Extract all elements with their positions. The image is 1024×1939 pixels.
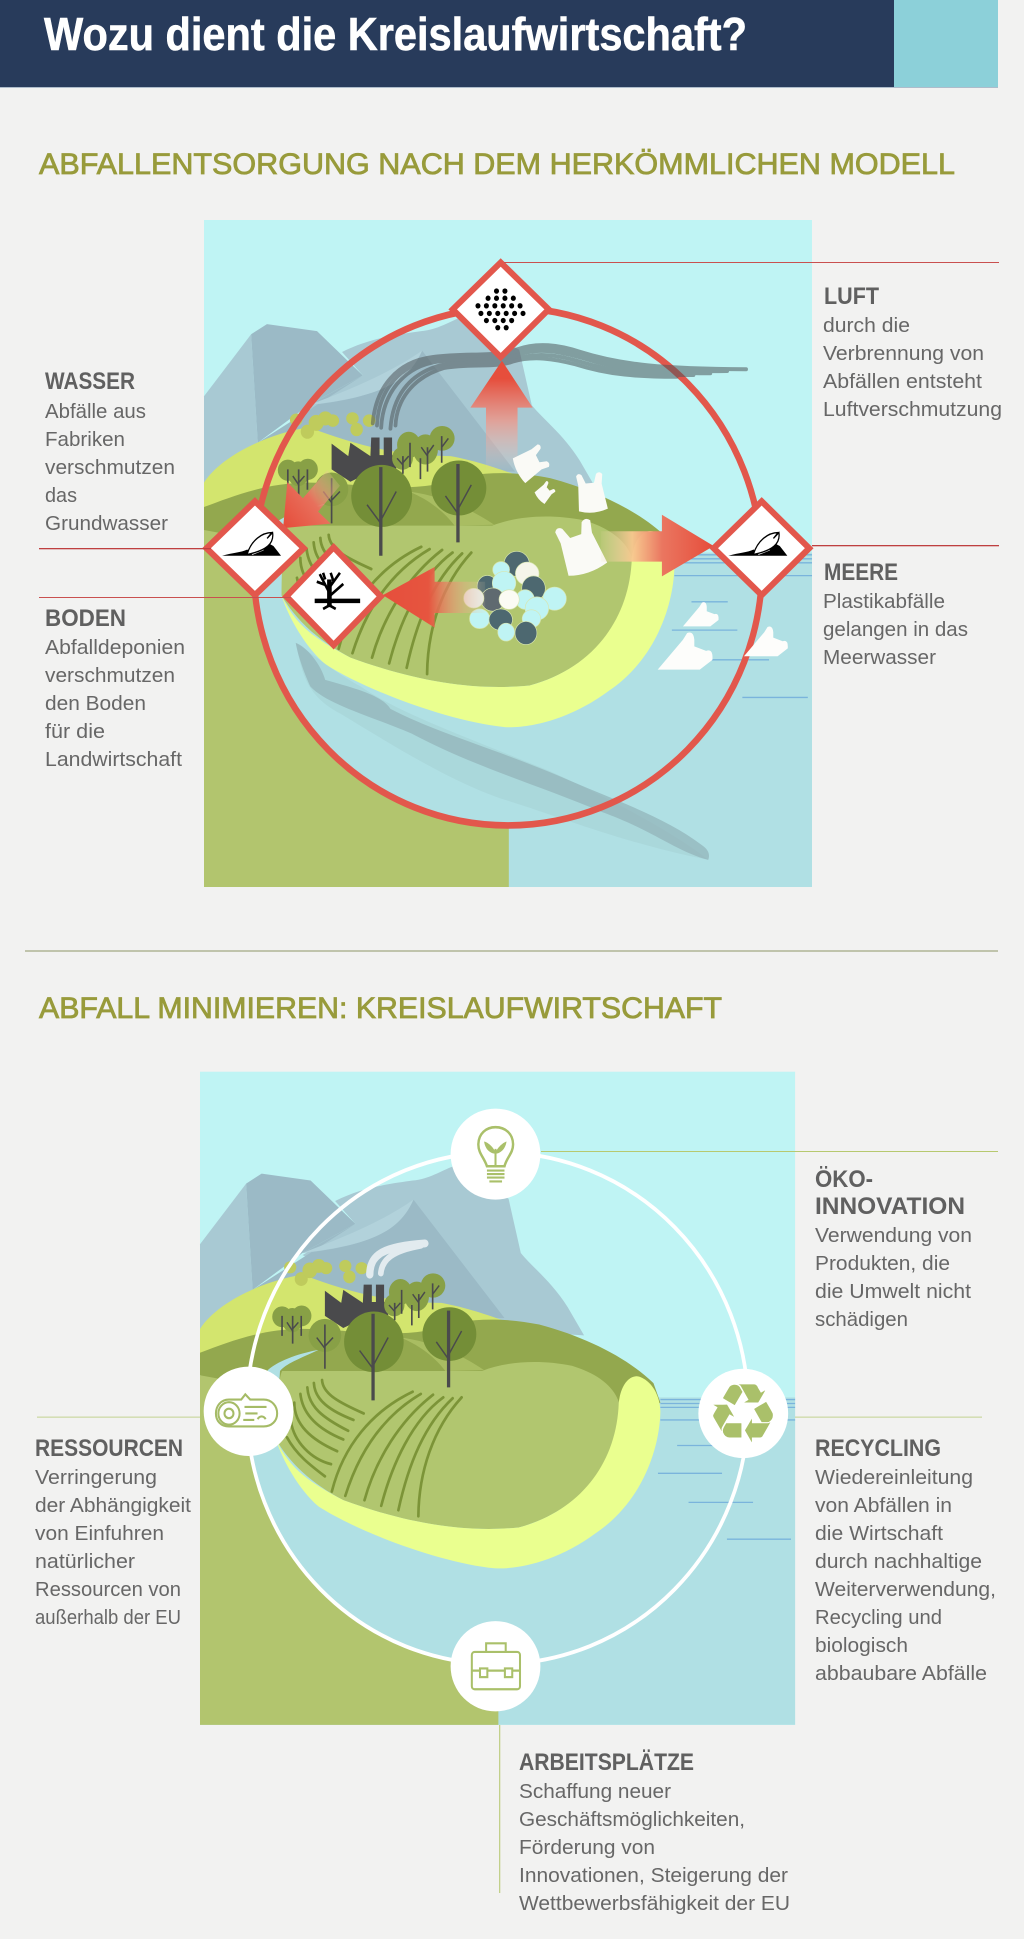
text block: Arbeitsplätze: ARBEITSPLÄTZE xyxy=(519,1749,694,1776)
pile of plastic pebbles xyxy=(464,551,566,645)
dark smoke plume xyxy=(373,345,746,429)
text block: Arbeitsplätze: Innovationen, Steigerung der xyxy=(519,1864,788,1887)
panel: circular economy landscape xyxy=(200,1072,795,1725)
hazard diamond: soil xyxy=(286,547,381,645)
text block: Wasser: das xyxy=(45,484,77,507)
arrow up to air xyxy=(470,361,533,472)
leader line: sea xyxy=(812,545,999,546)
text block: Arbeitsplätze: Förderung von xyxy=(519,1836,655,1859)
text block: Meere xyxy=(823,559,968,669)
text block: Öko-Innovation: ÖKO- xyxy=(815,1166,873,1193)
text block: Meere: gelangen in das xyxy=(823,618,968,641)
text block: Meere: Meerwasser xyxy=(823,646,936,669)
text block: Arbeitsplätze: Wettbewerbsfähigkeit der EU xyxy=(519,1892,790,1915)
text block: Öko-Innovation xyxy=(815,1166,972,1331)
text block: Wasser: Abfälle aus xyxy=(45,400,146,423)
text block: Recycling: biologisch xyxy=(815,1634,908,1657)
title: Wozu dient die Kreislaufwirtschaft? xyxy=(44,8,747,60)
text block: Öko-Innovation: Produkten, die xyxy=(815,1252,950,1275)
leader line: jobs xyxy=(499,1725,500,1893)
panel: traditional landscape with pollution xyxy=(204,220,812,887)
text block: Arbeitsplätze xyxy=(519,1749,790,1915)
text block: Boden: den Boden xyxy=(45,692,146,715)
icon: eco-innovation light bulb xyxy=(451,1109,540,1200)
text block: Recycling xyxy=(815,1435,996,1685)
text block: Luft: Luftverschmutzung xyxy=(823,398,1002,421)
recycling icon backing xyxy=(698,1369,788,1458)
text block: Luft xyxy=(823,283,1002,421)
polluted water stream xyxy=(296,643,709,860)
text block: Boden: für die xyxy=(45,720,105,743)
text block: Recycling: Weiterverwendung, xyxy=(815,1578,996,1601)
text block: Ressourcen: Ressourcen von xyxy=(35,1578,181,1601)
text block: Arbeitsplätze: Geschäftsmöglichkeiten, xyxy=(519,1808,745,1831)
text block: Recycling: Wiedereinleitung xyxy=(815,1466,973,1489)
arrow to soil xyxy=(383,567,485,628)
plastic bags on land and in sea xyxy=(511,443,788,670)
text block: Recycling: Recycling und xyxy=(815,1606,942,1629)
text block: Ressourcen: von Einfuhren xyxy=(35,1522,164,1545)
text block: Luft: durch die xyxy=(823,314,910,337)
text block: Öko-Innovation: INNOVATION xyxy=(815,1193,965,1220)
text block: Boden: Landwirtschaft xyxy=(45,748,182,771)
text block: Ressourcen: natürlicher xyxy=(35,1550,135,1573)
text block: Recycling: durch nachhaltige xyxy=(815,1550,982,1573)
text block: Wasser: Grundwasser xyxy=(45,512,168,535)
text block: Boden xyxy=(45,605,185,771)
red circle xyxy=(254,308,762,825)
text block: Luft: Abfällen entsteht xyxy=(823,370,982,393)
hazard diamond: sea xyxy=(714,501,809,595)
section heading: traditional model: ABFALLENTSORGUNG NACH DEM HERKÖMMLICHEN MODELL xyxy=(39,148,955,181)
text block: Meere: MEERE xyxy=(824,559,898,586)
text block: Boden: BODEN xyxy=(45,605,126,632)
landscape illustration xyxy=(204,220,812,887)
leader line: air xyxy=(504,262,999,263)
text block: Recycling: von Abfällen in xyxy=(815,1494,952,1517)
circular overlay in zoomed coordinates xyxy=(204,1109,788,1711)
arrow to water xyxy=(283,470,340,528)
pollution overlay in zoomed coordinates xyxy=(207,263,809,860)
text block: Ressourcen: der Abhängigkeit xyxy=(35,1494,191,1517)
text block: Ressourcen: Verringerung xyxy=(35,1466,157,1489)
text block: Meere: Plastikabfälle xyxy=(823,590,945,613)
text block: Recycling: die Wirtschaft xyxy=(815,1522,943,1545)
leader line: resources xyxy=(37,1416,200,1418)
text block: Recycling: abbaubare Abfälle xyxy=(815,1662,987,1685)
clean landscape illustration xyxy=(200,1072,795,1725)
header bar xyxy=(0,0,998,88)
text block: Luft: Verbrennung von xyxy=(823,342,984,365)
text block: Ressourcen: außerhalb der EU xyxy=(35,1606,181,1629)
leader line: soil xyxy=(39,597,291,598)
text block: Wasser: Fabriken xyxy=(45,428,125,451)
text block: Öko-Innovation: die Umwelt nicht xyxy=(815,1280,971,1303)
text block: Wasser xyxy=(45,368,175,535)
text block: Arbeitsplätze: Schaffung neuer xyxy=(519,1780,671,1803)
text block: Recycling: RECYCLING xyxy=(815,1435,941,1462)
text block: Luft: LUFT xyxy=(824,283,879,310)
icon: recycling symbol: ♻ xyxy=(706,1367,780,1462)
arrow to sea xyxy=(601,515,714,576)
leader line: water xyxy=(39,548,211,549)
text block: Ressourcen: RESSOURCEN xyxy=(35,1435,183,1462)
icon: jobs briefcase xyxy=(451,1621,540,1711)
section heading: circular economy: ABFALL MINIMIEREN: KREISLAUFWIRTSCHAFT xyxy=(39,992,722,1025)
leader line: eco-innovation xyxy=(541,1151,998,1152)
text block: Boden: verschmutzen xyxy=(45,664,175,687)
text block: Wasser: WASSER xyxy=(45,368,135,395)
icon: resources log xyxy=(204,1367,293,1456)
text block: Öko-Innovation: schädigen xyxy=(815,1308,908,1331)
hazard diamond: water xyxy=(207,501,304,595)
text block: Boden: Abfalldeponien xyxy=(45,636,185,659)
white smoke xyxy=(370,1243,425,1275)
text block: Wasser: verschmutzen xyxy=(45,456,175,479)
hazard diamond: air xyxy=(453,263,549,357)
white circle xyxy=(247,1152,748,1664)
text block: Ressourcen xyxy=(35,1435,191,1629)
leader line: recycling xyxy=(795,1416,982,1418)
text block: Öko-Innovation: Verwendung von xyxy=(815,1224,972,1247)
